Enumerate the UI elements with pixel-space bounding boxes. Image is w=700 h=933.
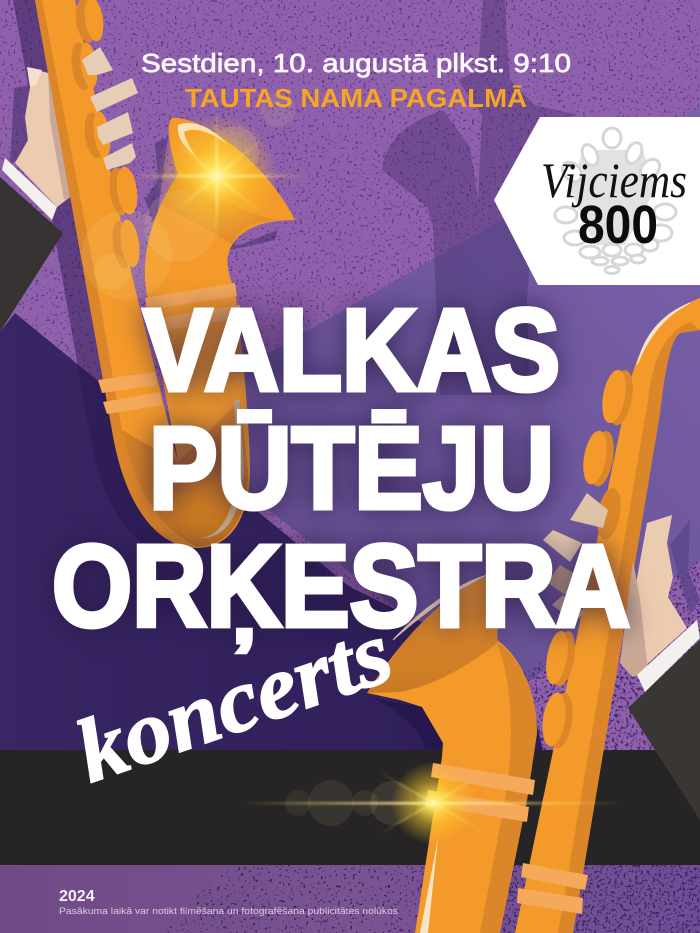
icon: left hand	[15, 67, 70, 207]
lower bow shading	[122, 400, 248, 547]
panel: dense speckle near right hand	[528, 560, 700, 750]
logo number: 800	[578, 195, 658, 255]
band: black stripe	[0, 750, 700, 865]
shadow: under right bell	[372, 697, 443, 750]
text: filming notice: Pasākuma laikā var notikt filmēšana un fotografēšana publicitātes nolūkos	[59, 906, 399, 916]
text: date and time: Sestdien, 10. augustā plkst. 9:10	[141, 48, 571, 78]
icon: right hand	[620, 515, 687, 677]
icons: right fingers	[543, 493, 608, 622]
shadow: left saxophone bell	[145, 137, 278, 270]
rings	[98, 283, 240, 414]
icons: left saxophone keys	[69, 0, 142, 270]
shadow: right hand	[670, 520, 700, 615]
band: bottom strip	[0, 865, 700, 933]
icon: left sleeve	[0, 158, 63, 332]
flare: upper golden sparkle	[82, 93, 305, 300]
title: orchestra name: PŪTĒJU	[149, 403, 554, 533]
title: orchestra name: ORĶESTRA	[52, 521, 630, 652]
text: location: TAUTAS NAMA PAGALMĀ	[185, 83, 527, 113]
highlight on lower bow	[199, 400, 244, 538]
rings: right saxophone	[426, 763, 588, 914]
silhouette: background saxophone shadow	[382, 0, 578, 395]
title: orchestra name	[52, 285, 630, 652]
logo pine cone	[555, 128, 676, 274]
shadow: left saxophone	[13, 0, 228, 553]
logo hexagon	[494, 117, 700, 285]
panel: violet diagonal	[151, 107, 700, 695]
logo: Vijciems 800	[494, 117, 700, 285]
shadow: left hand	[10, 85, 30, 165]
icon: right sleeve	[628, 620, 700, 820]
text: koncerts script: koncerts	[64, 602, 404, 802]
panel: navy diagonal	[0, 313, 543, 750]
flare: lower golden sparkle	[240, 761, 625, 845]
highlight on bell	[178, 123, 228, 158]
saxophone: right tube	[515, 298, 700, 933]
text: year: 2024	[59, 888, 95, 905]
bell: right saxophone bell and lower tube	[367, 572, 537, 933]
bell shading	[160, 175, 280, 245]
saxophone body and bell	[35, 0, 295, 548]
left tube shading	[35, 0, 197, 548]
icons: left fingers	[82, 47, 138, 170]
saxophone: left instrument	[35, 0, 295, 548]
title: orchestra name: VALKAS	[143, 285, 560, 415]
icons: right saxophone keys	[539, 367, 637, 750]
